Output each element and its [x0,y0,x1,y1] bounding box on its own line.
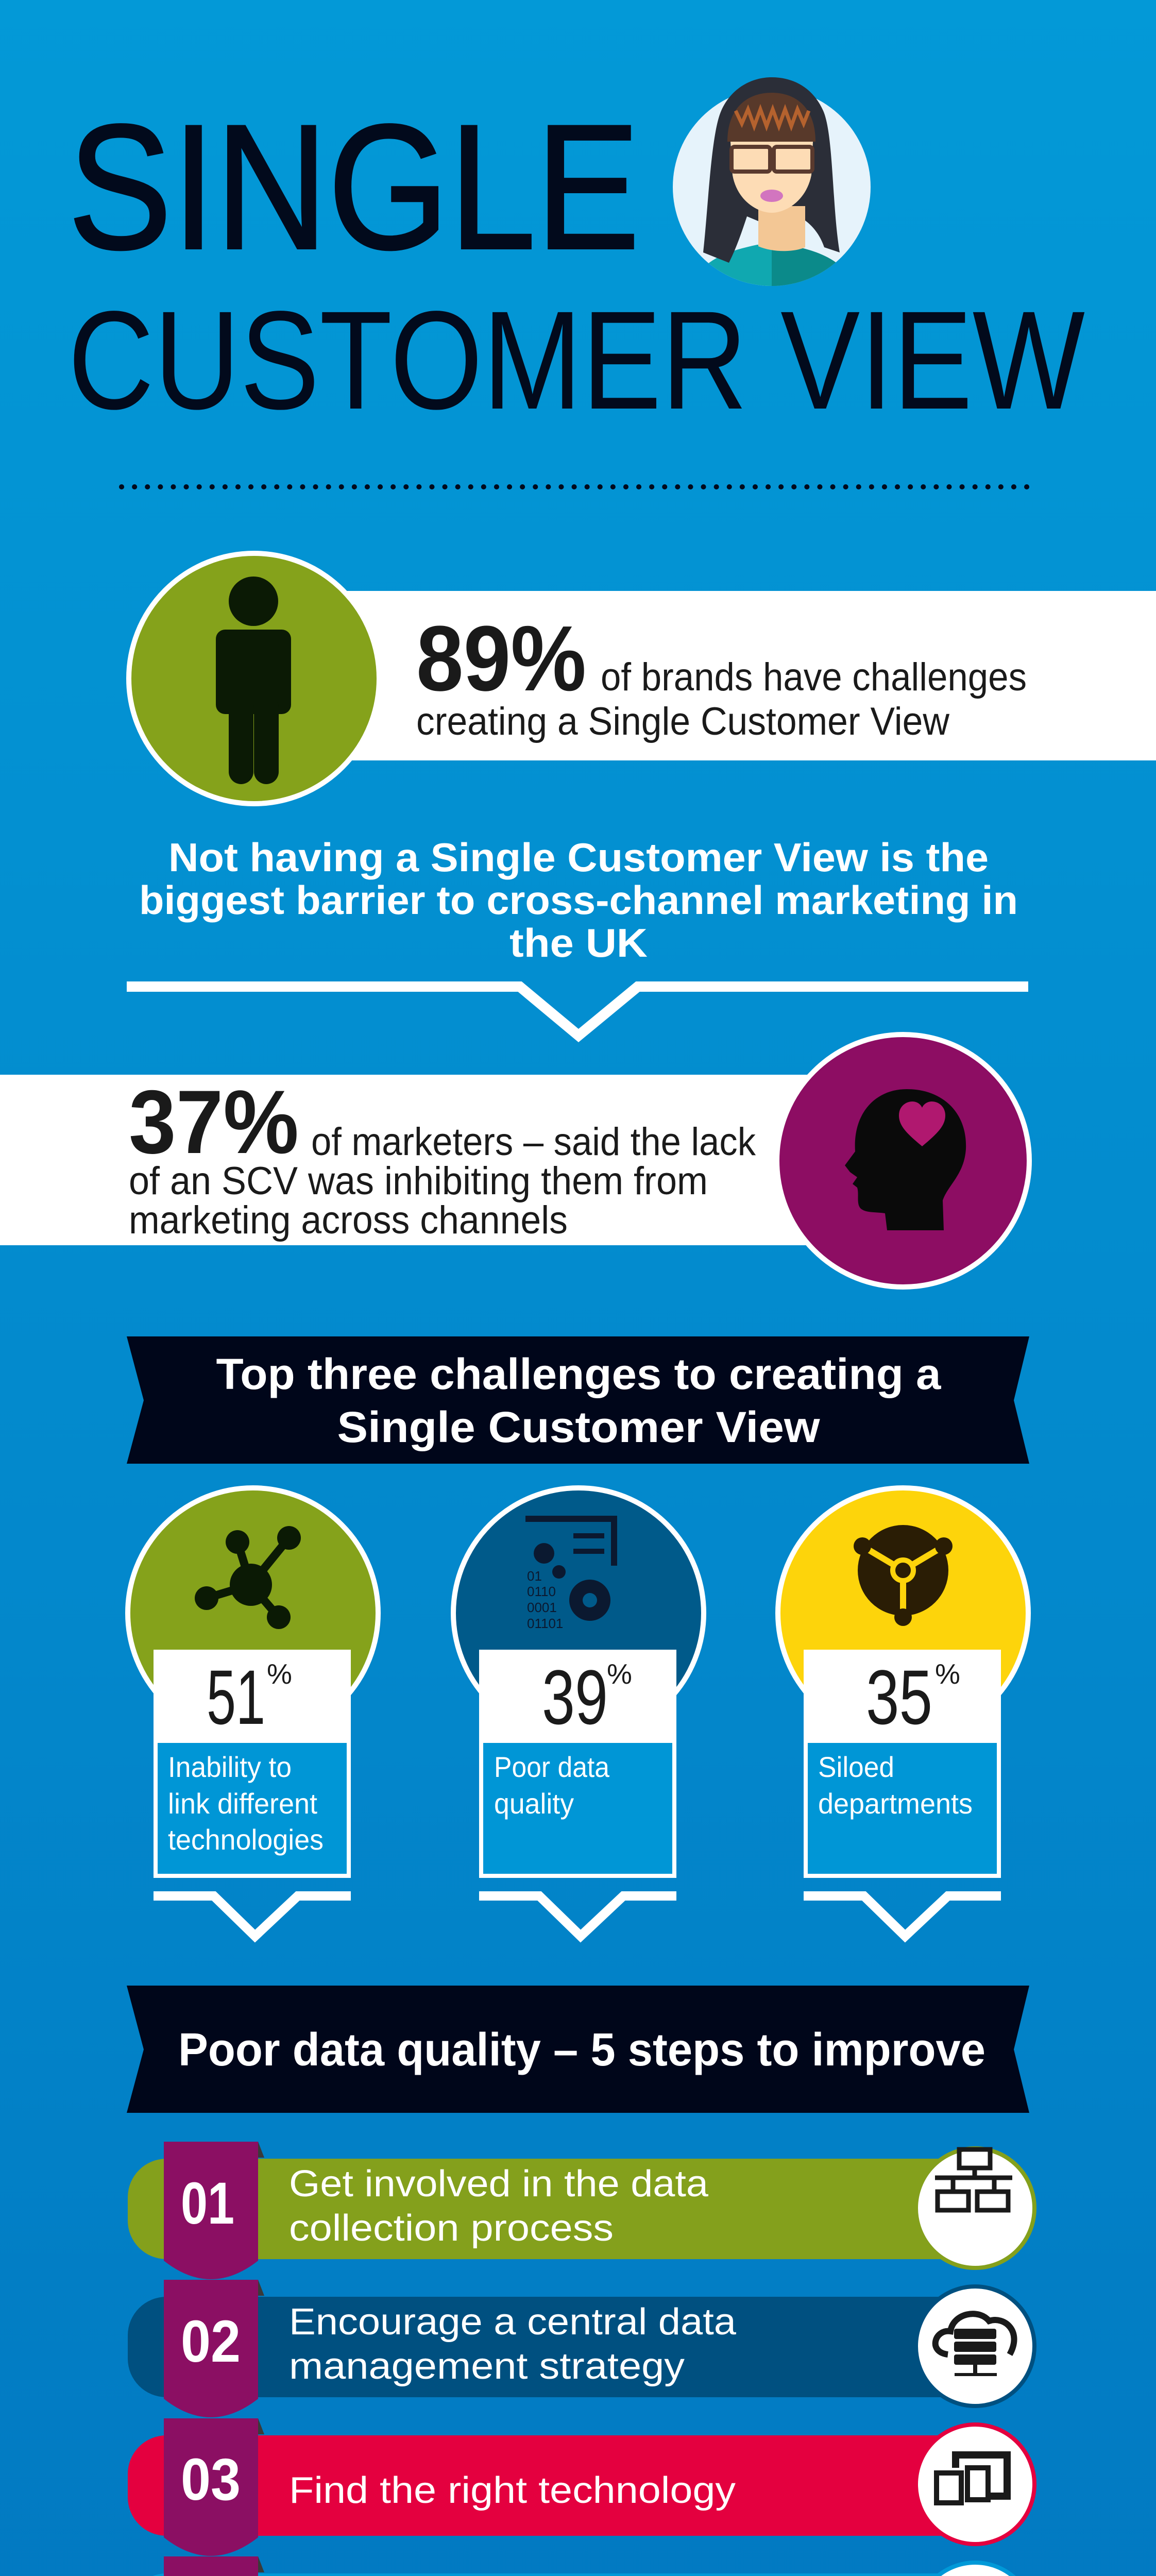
text: 37%: marketing across channels [129,1198,568,1242]
step 01 [128,2142,1034,2279]
step 01: 01 [181,2171,234,2236]
title: SINGLE [68,88,640,286]
icon: presenter [916,2563,1034,2576]
arrow: chevron 2 [479,1896,676,1936]
panel: challenge 35%: 35 [866,1654,932,1740]
text block: barrier statement [139,835,1018,965]
panel: challenge 39%: 39 [542,1654,608,1740]
panel: challenge 35%: % [935,1658,960,1690]
text: 89%: creating a Single Customer View [416,700,950,743]
text block: barrier statement: Not having a Single Customer View is the [168,835,989,880]
panel: 89% stat [129,553,1156,804]
panel: challenge 35%: departments [818,1787,973,1820]
text block: barrier statement: the UK [509,920,648,965]
heading ribbon: top three challenges: Single Customer View [337,1403,820,1451]
step 02: Encourage a central data [289,2301,737,2343]
icon: triad [854,1525,953,1626]
text: 37%: of an SCV was inhibiting them from [129,1159,708,1203]
panel: challenge 35%: Siloed [818,1751,894,1783]
panel: challenge 51%: Inability to [168,1751,292,1783]
text: 89% [416,607,1027,743]
heading ribbon: poor data quality: Poor data quality – 5 steps to improve [178,2024,985,2076]
step 01: collection process [289,2208,614,2249]
icon: network computers [916,2148,1034,2268]
heading ribbon: top three challenges: Top three challenges to creating a [216,1350,942,1398]
heading ribbon: top three challenges [127,1336,1029,1464]
step 03: 03 [181,2447,241,2513]
icon: network [195,1526,301,1629]
icon: data gears: 01101 [527,1616,563,1631]
arrow: chevron 1 [154,1896,351,1936]
icon: person in green circle [129,553,379,804]
panel: challenge 51%: % [267,1658,292,1690]
icon: data gears: 0110 [527,1584,556,1599]
panel: challenge 39% [453,1488,704,1876]
step 02: 02 [181,2309,241,2375]
text: 37%: 37% [129,1072,299,1173]
text: 37% [129,1072,756,1242]
icon: data gears [525,1516,617,1631]
text: 89%: of brands have challenges [601,655,1027,699]
icon: devices [916,2425,1034,2544]
panel: challenge 39%: quality [494,1787,574,1820]
arrow: chevron line [127,987,1028,1036]
text: 89%: 89% [416,607,586,710]
panel: challenge 35% [778,1488,1028,1876]
text block: barrier statement: biggest barrier to cross-channel marketing in [139,877,1018,923]
panel: challenge 51% [128,1488,378,1876]
panel: challenge 51%: link different [168,1787,317,1820]
title [68,88,1086,438]
panel: challenge 39%: % [607,1658,632,1690]
divider dotted line [122,484,1028,489]
step 02: management strategy [289,2346,685,2387]
heading ribbon: poor data quality [127,1986,1029,2113]
step 04 [128,2556,1034,2576]
step 03: Find the right technology [289,2470,736,2511]
icon: head with heart [777,1035,1029,1287]
panel: challenge 39%: Poor data [494,1751,610,1783]
step 02 [128,2280,1034,2417]
icon: avatar woman [673,77,871,309]
text: 37%: of marketers – said the lack [311,1120,756,1164]
step 01: Get involved in the data [289,2163,709,2205]
panel: challenge 51%: technologies [168,1823,324,1856]
icon: data gears: 01 [527,1568,542,1584]
icon: data gears: 0001 [527,1600,557,1615]
step 03 [128,2418,1034,2556]
icon: cloud server [916,2286,1034,2406]
arrow: chevron 3 [804,1896,1001,1936]
panel: challenge 51%: 51 [207,1654,265,1740]
panel: 37% stat [0,1035,1029,1287]
